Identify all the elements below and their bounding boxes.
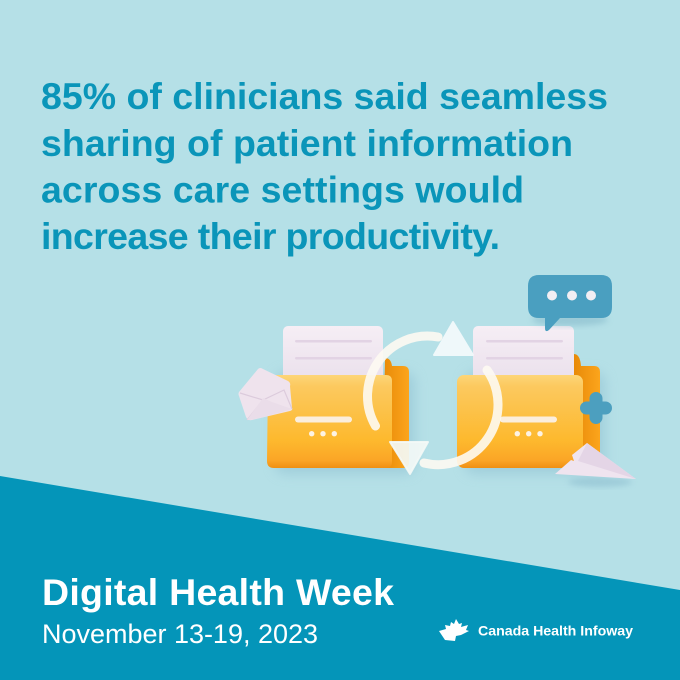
headline: sharing of patient information: [41, 122, 573, 164]
icon: paper plane: [555, 443, 636, 487]
illustration: left folder: [267, 326, 415, 474]
cycle arrows: [368, 322, 498, 474]
icon: plus: [586, 398, 606, 418]
headline: increase their productivity.: [41, 215, 500, 257]
illustration: right folder: [457, 326, 605, 474]
headline: across care settings would: [41, 168, 524, 210]
icon: envelope: [238, 368, 292, 420]
event dates: November 13-19, 2023: [42, 619, 318, 649]
bottom band: [0, 476, 680, 680]
event title: Digital Health Week: [42, 571, 394, 613]
headline: [41, 75, 608, 257]
icon: speech bubble: [528, 275, 612, 331]
logo: Canada Health Infoway: [439, 619, 633, 641]
headline: 85% of clinicians said seamless: [41, 75, 608, 117]
logo: Canada Health Infoway: Canada Health Infoway: [478, 624, 633, 640]
